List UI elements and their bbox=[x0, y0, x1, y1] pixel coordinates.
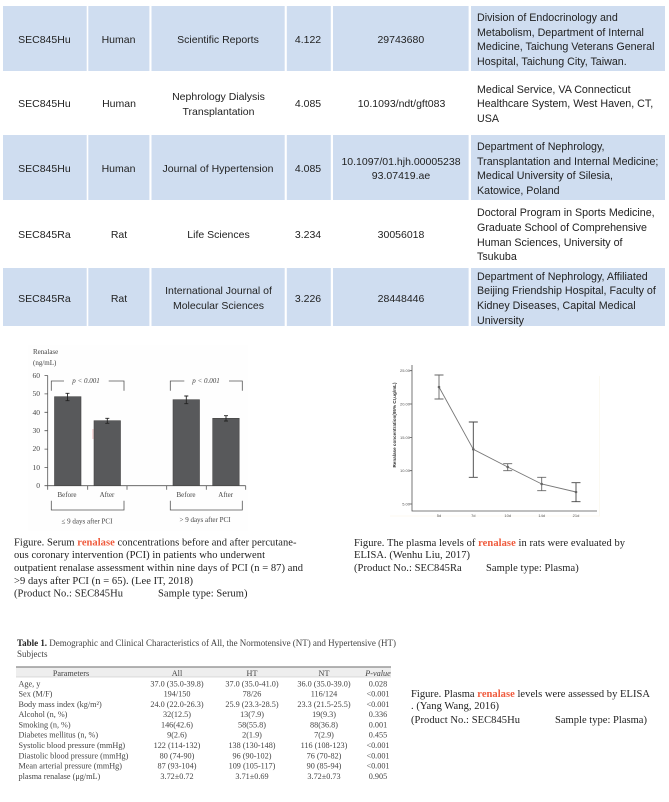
line chart: plasma renalase in rats: 10d bbox=[504, 513, 511, 518]
table 1: demographic and clinical characteristics: <0.001 bbox=[366, 690, 390, 698]
caption: human plasma figure: (Product No.: SEC845Hu bbox=[411, 715, 521, 726]
row: International Journal of Molecular Sciences: 28448446 bbox=[378, 293, 425, 305]
table 1: demographic and clinical characteristics: 36.0 (35.0-39.0) bbox=[297, 680, 351, 688]
bar chart: serum renalase before and after PCI: 0 bbox=[36, 481, 40, 490]
row: Nephrology Dialysis Transplantation: SEC845Hu bbox=[18, 98, 71, 110]
caption: rat plasma figure bbox=[354, 538, 626, 574]
table 1: demographic and clinical characteristics: 3.72±0.72 bbox=[160, 772, 194, 781]
bar chart: serum renalase before and after PCI: 40 bbox=[32, 408, 40, 417]
row: Journal of Hypertension: Department of Nephrology, bbox=[477, 141, 605, 153]
bar chart: serum renalase before and after PCI: After bbox=[100, 491, 115, 499]
table 1: demographic and clinical characteristics: NT bbox=[319, 669, 329, 678]
table 1: demographic and clinical characteristics: Age, y bbox=[18, 680, 41, 688]
table 1: demographic and clinical characteristics: 88(36.8) bbox=[310, 720, 338, 730]
table 1: demographic and clinical characteristics: Alcohol (n, %) bbox=[18, 710, 68, 719]
table 1: demographic and clinical characteristics: Smoking (n, %) bbox=[18, 720, 71, 730]
product citation table bbox=[3, 6, 665, 327]
row: Scientific Reports: 4.122 bbox=[295, 34, 321, 46]
bar chart: serum renalase before and after PCI: Before bbox=[176, 491, 196, 499]
row: Nephrology Dialysis Transplantation: Healthcare System, West Haven, CT, bbox=[477, 98, 653, 110]
caption: rat plasma figure: (Product No.: SEC845Ra bbox=[354, 563, 462, 574]
row: Journal of Hypertension: SEC845Hu bbox=[18, 163, 71, 175]
row: International Journal of Molecular Sciences: Beijing Friendship Hospital, Faculty of bbox=[477, 285, 656, 297]
bar chart: serum renalase before and after PCI: > 9 days after PCI bbox=[180, 516, 231, 524]
table 1: demographic and clinical characteristics: <0.001 bbox=[366, 752, 390, 760]
table 1: demographic and clinical characteristics: Mean arterial pressure (mmHg) bbox=[18, 762, 122, 770]
line chart: plasma renalase in rats: 21d bbox=[573, 513, 579, 518]
table 1: demographic and clinical characteristics: 76 (70-82) bbox=[307, 752, 342, 760]
bar chart: serum renalase before and after PCI: 10 bbox=[32, 463, 40, 472]
row: Life Sciences: Tsukuba bbox=[477, 251, 517, 263]
row: Scientific Reports: Scientific Reports bbox=[177, 34, 259, 46]
table 1: demographic and clinical characteristics: P-value bbox=[364, 669, 391, 678]
table 1: demographic and clinical characteristics bbox=[16, 638, 396, 781]
table 1: demographic and clinical characteristics: 87 (93-104) bbox=[158, 762, 197, 770]
row: Life Sciences: SEC845Ra bbox=[18, 229, 71, 241]
table 1: demographic and clinical characteristics: <0.001 bbox=[366, 700, 390, 709]
bar chart: serum renalase before and after PCI: 20 bbox=[32, 444, 40, 453]
table 1: demographic and clinical characteristics: 0.336 bbox=[369, 710, 387, 719]
line chart: plasma renalase in rats: 7d bbox=[471, 513, 476, 518]
row: Scientific Reports: Metabolism, Department of Internal bbox=[477, 27, 644, 39]
table 1: demographic and clinical characteristics: Sex (M/F) bbox=[18, 690, 53, 698]
row: Journal of Hypertension: 4.085 bbox=[295, 163, 321, 175]
row: Nephrology Dialysis Transplantation bbox=[18, 84, 653, 125]
row: Scientific Reports: 29743680 bbox=[377, 34, 424, 46]
table 1: demographic and clinical characteristics: <0.001 bbox=[366, 762, 390, 770]
table 1: demographic and clinical characteristics: Diastolic blood pressure (mmHg) bbox=[18, 752, 129, 760]
table 1: demographic and clinical characteristics: 3.71±0.69 bbox=[235, 772, 269, 781]
table 1: demographic and clinical characteristics: 2(1.9) bbox=[242, 730, 262, 740]
table 1: demographic and clinical characteristics: 122 (114-132) bbox=[154, 741, 201, 750]
row: Life Sciences: 3.234 bbox=[295, 229, 321, 241]
row: Nephrology Dialysis Transplantation: Medical Service, VA Connecticut bbox=[477, 84, 631, 96]
line chart: plasma renalase in rats: 20.00 bbox=[400, 402, 411, 406]
row: International Journal of Molecular Sciences: Rat bbox=[111, 293, 127, 305]
table 1: demographic and clinical characteristics: 0.001 bbox=[369, 720, 387, 730]
row: Nephrology Dialysis Transplantation: Human bbox=[102, 98, 136, 110]
table 1: demographic and clinical characteristics: 13(7.9) bbox=[240, 710, 264, 719]
bar chart: serum renalase before and after PCI bbox=[28, 345, 248, 531]
row: Nephrology Dialysis Transplantation: 10.1093/ndt/gft083 bbox=[358, 98, 445, 110]
row: Journal of Hypertension: Journal of Hypertension bbox=[163, 163, 274, 175]
row: International Journal of Molecular Sciences: Department of Nephrology, Affiliated bbox=[477, 271, 648, 283]
table 1: demographic and clinical characteristics: 37.0 (35.0-39.8) bbox=[150, 680, 204, 688]
table 1: demographic and clinical characteristics: Subjects bbox=[17, 649, 48, 659]
line chart: plasma renalase in rats: 25.00 bbox=[400, 368, 411, 373]
caption: serum renalase figure: >9 days after PCI (n = 65). (Lee IT, 2018) bbox=[14, 576, 194, 587]
row: Nephrology Dialysis Transplantation: 4.085 bbox=[295, 98, 321, 110]
bar chart: serum renalase before and after PCI: Before bbox=[57, 491, 77, 499]
row: Scientific Reports: SEC845Hu bbox=[18, 34, 71, 46]
row: Scientific Reports: Division of Endocrinology and bbox=[477, 12, 618, 24]
table 1: demographic and clinical characteristics: 138 (130-148) bbox=[228, 741, 276, 750]
caption: rat plasma figure: Figure. The plasma levels of renalase in rats were evaluated by bbox=[354, 538, 626, 549]
caption: serum renalase figure: Figure. Serum renalase concentrations before and after percutane- bbox=[14, 538, 297, 548]
table 1: demographic and clinical characteristics: 3.72±0.73 bbox=[307, 772, 341, 781]
table 1: demographic and clinical characteristics: <0.001 bbox=[366, 741, 390, 750]
bar chart: serum renalase before and after PCI: (ng/mL) bbox=[33, 359, 57, 367]
row: Scientific Reports bbox=[3, 6, 665, 71]
bar chart: serum renalase before and after PCI: 30 bbox=[32, 426, 40, 435]
table 1: demographic and clinical characteristics: All bbox=[172, 669, 183, 678]
table 1: demographic and clinical characteristics: Systolic blood pressure (mmHg) bbox=[18, 741, 125, 750]
table 1: demographic and clinical characteristics: 116 (108-123) bbox=[301, 741, 348, 750]
caption: rat plasma figure: Sample type: Plasma) bbox=[486, 563, 579, 574]
caption: serum renalase figure: Sample type: Serum) bbox=[158, 588, 248, 600]
row: Scientific Reports: Human bbox=[102, 34, 136, 46]
row: International Journal of Molecular Sciences: University bbox=[477, 315, 525, 327]
row: Journal of Hypertension bbox=[3, 135, 665, 200]
row: Life Sciences: Life Sciences bbox=[187, 229, 250, 241]
table 1: demographic and clinical characteristics: 19(9.3) bbox=[312, 710, 336, 719]
table 1: demographic and clinical characteristics: 109 (105-117) bbox=[229, 762, 276, 770]
row: Scientific Reports: Hospital, Taichung City, Taiwan. bbox=[477, 56, 627, 68]
caption: serum renalase figure: ous coronary intervention (PCI) in patients who underwent bbox=[14, 550, 265, 561]
bar chart: serum renalase before and after PCI: 60 bbox=[32, 371, 40, 380]
table 1: demographic and clinical characteristics: 116/124 bbox=[311, 690, 337, 698]
row: Journal of Hypertension: Medical University of Silesia, bbox=[477, 170, 613, 182]
line chart: plasma renalase in rats bbox=[390, 365, 600, 518]
bar chart: serum renalase before and after PCI: 50 bbox=[32, 389, 40, 398]
row: Journal of Hypertension: Transplantation and Internal Medicine; bbox=[477, 156, 658, 168]
line chart: plasma renalase in rats: Renalase concentration(95% CI,ug/mL) bbox=[392, 382, 397, 468]
bar chart: serum renalase before and after PCI: p < 0.001 bbox=[191, 377, 220, 385]
table 1: demographic and clinical characteristics: 0.905 bbox=[369, 772, 387, 781]
caption: human plasma figure bbox=[411, 689, 650, 726]
row: International Journal of Molecular Sciences: 3.226 bbox=[295, 293, 321, 305]
table 1: demographic and clinical characteristics: Body mass index (kg/m²) bbox=[18, 700, 102, 709]
table 1: demographic and clinical characteristics: 58(55.8) bbox=[238, 720, 266, 730]
bar chart: serum renalase before and after PCI: ≤ 9 days after PCI bbox=[62, 518, 113, 526]
table 1: demographic and clinical characteristics: 7(2.9) bbox=[314, 730, 334, 740]
caption: serum renalase figure: outpatient renalase assessment within nine days of PCI (n = 87) and bbox=[14, 563, 304, 574]
caption: serum renalase figure bbox=[14, 538, 304, 600]
table 1: demographic and clinical characteristics: 25.9 (23.3-28.5) bbox=[225, 700, 279, 709]
row: International Journal of Molecular Sciences: Kidney Diseases, Capital Medical bbox=[477, 300, 636, 312]
row: International Journal of Molecular Sciences: Molecular Sciences bbox=[173, 300, 264, 312]
line chart: plasma renalase in rats: 5.00 bbox=[402, 502, 411, 506]
table 1: demographic and clinical characteristics: 32(12.5) bbox=[163, 710, 191, 719]
caption: human plasma figure: . (Yang Wang, 2016) bbox=[411, 701, 500, 712]
caption: rat plasma figure: ELISA. (Wenhu Liu, 2017) bbox=[354, 550, 470, 561]
table 1: demographic and clinical characteristics: 194/150 bbox=[164, 690, 190, 698]
table 1: demographic and clinical characteristics: HT bbox=[247, 669, 257, 678]
line chart: plasma renalase in rats: 15.00 bbox=[400, 435, 411, 440]
line chart: plasma renalase in rats: 5d bbox=[437, 513, 441, 518]
row: International Journal of Molecular Sciences: International Journal of bbox=[165, 285, 272, 297]
table 1: demographic and clinical characteristics: 146(42.6) bbox=[161, 720, 193, 730]
table 1: demographic and clinical characteristics: 80 (74-90) bbox=[160, 752, 195, 760]
table 1: demographic and clinical characteristics: 78/26 bbox=[243, 690, 261, 698]
row: Journal of Hypertension: 93.07419.ae bbox=[372, 170, 430, 182]
row: Life Sciences: Graduate School of Comprehensive bbox=[477, 222, 647, 234]
row: Journal of Hypertension: Human bbox=[102, 163, 136, 175]
table 1: demographic and clinical characteristics: 0.455 bbox=[369, 730, 387, 740]
table 1: demographic and clinical characteristics: 9(2.6) bbox=[167, 730, 187, 740]
table 1: demographic and clinical characteristics: 23.3 (21.5-25.5) bbox=[297, 700, 351, 709]
table 1: demographic and clinical characteristics: Parameters bbox=[53, 669, 89, 678]
bar chart: serum renalase before and after PCI: p < 0.001 bbox=[71, 377, 100, 385]
caption: serum renalase figure: (Product No.: SEC845Hu bbox=[14, 588, 124, 600]
row: Life Sciences: 30056018 bbox=[378, 229, 425, 241]
table 1: demographic and clinical characteristics: 90 (85-94) bbox=[307, 762, 342, 770]
bar chart: serum renalase before and after PCI: After bbox=[218, 491, 234, 499]
table 1: demographic and clinical characteristics: 0.028 bbox=[369, 680, 387, 688]
row: Nephrology Dialysis Transplantation: USA bbox=[477, 113, 500, 125]
row: Scientific Reports: Medicine, Taichung Veterans General bbox=[477, 41, 654, 53]
table 1: demographic and clinical characteristics: plasma renalase (μg/mL) bbox=[18, 772, 100, 781]
row: Life Sciences bbox=[18, 207, 655, 263]
row: International Journal of Molecular Sciences: SEC845Ra bbox=[18, 293, 71, 305]
caption: human plasma figure: Figure. Plasma renalase levels were assessed by ELISA bbox=[411, 689, 650, 700]
table 1: demographic and clinical characteristics: 24.0 (22.0-26.3) bbox=[150, 700, 204, 709]
table 1: demographic and clinical characteristics: 37.0 (35.0-41.0) bbox=[225, 680, 279, 688]
row: Nephrology Dialysis Transplantation: Transplantation bbox=[182, 106, 255, 118]
table 1 heading: Table 1. Demographic and Clinical Characteristics of All, the Normotensive (NT) and Hypertensive (HT) bbox=[17, 638, 396, 648]
table 1: demographic and clinical characteristics: 96 (90-102) bbox=[233, 752, 272, 760]
row: Life Sciences: Rat bbox=[111, 229, 127, 241]
row: Life Sciences: Human Sciences, University of bbox=[477, 237, 623, 249]
line chart: plasma renalase in rats: 14d bbox=[538, 513, 545, 518]
row: Life Sciences: Doctoral Program in Sports Medicine, bbox=[477, 207, 655, 219]
line chart: plasma renalase in rats: 10.00 bbox=[400, 468, 411, 473]
row: International Journal of Molecular Sciences bbox=[3, 268, 665, 327]
row: Journal of Hypertension: 10.1097/01.hjh.00005238 bbox=[341, 156, 461, 168]
row: Journal of Hypertension: Katowice, Poland bbox=[477, 185, 560, 197]
bar chart: serum renalase before and after PCI: Renalase bbox=[33, 348, 58, 356]
table 1: demographic and clinical characteristics: Diabetes mellitus (n, %) bbox=[18, 730, 98, 740]
row: Nephrology Dialysis Transplantation: Nephrology Dialysis bbox=[172, 91, 265, 103]
caption: human plasma figure: Sample type: Plasma) bbox=[555, 715, 648, 726]
